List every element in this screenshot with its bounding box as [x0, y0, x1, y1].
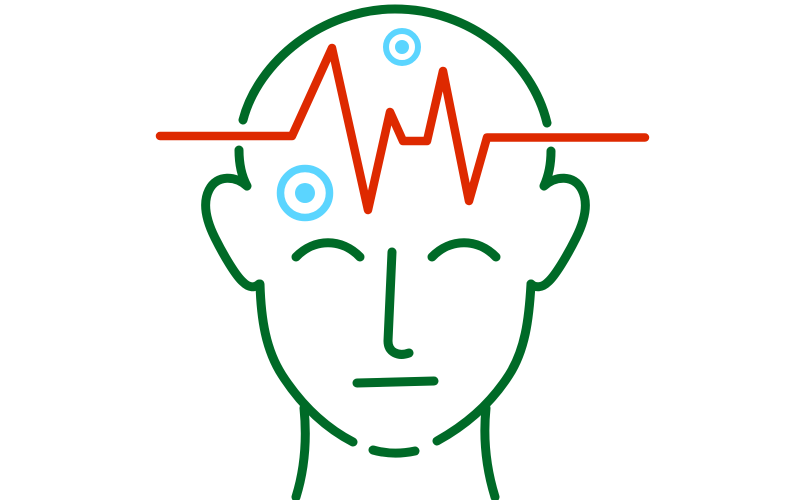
icon: small target [386, 31, 418, 63]
nose [388, 252, 409, 354]
skull arc [243, 9, 547, 123]
left ear [206, 150, 259, 287]
mouth [357, 381, 434, 383]
left eye [296, 243, 360, 257]
left jaw [260, 284, 353, 442]
right ear [531, 151, 585, 287]
icon: head outline [206, 9, 585, 497]
icon: large target [280, 168, 330, 218]
right eye [432, 243, 496, 257]
pulse line [160, 48, 645, 210]
chin [373, 450, 415, 453]
right neck [485, 408, 495, 497]
right jaw [437, 284, 531, 441]
left neck [296, 408, 305, 497]
